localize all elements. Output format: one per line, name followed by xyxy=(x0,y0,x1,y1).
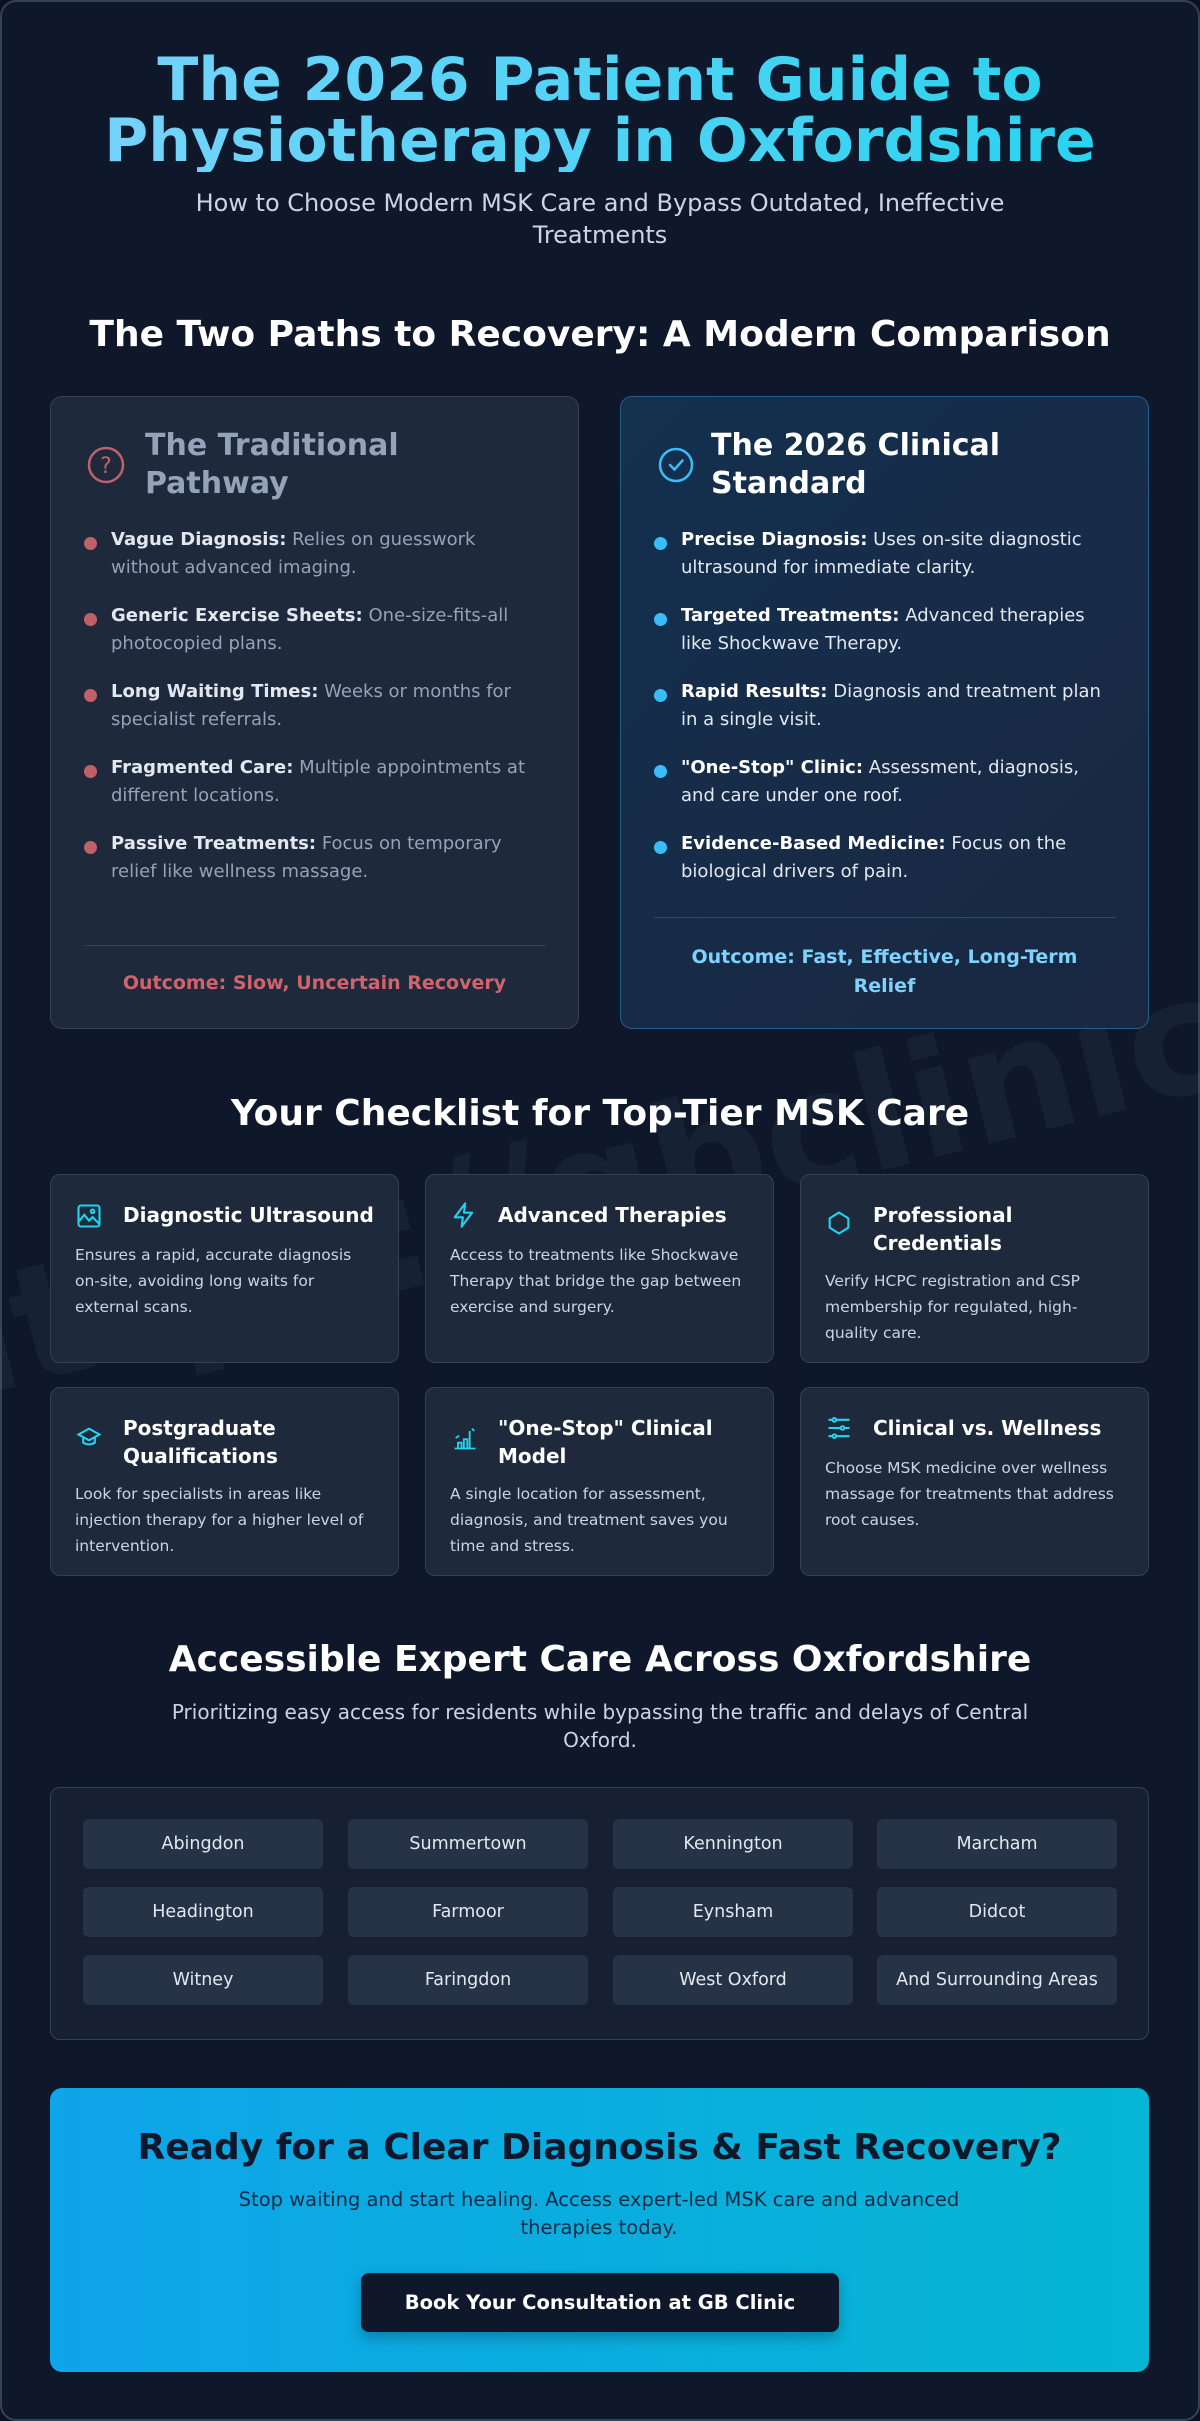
icon: check xyxy=(658,448,694,482)
card: one-stop: "One-Stop" Clinical Model xyxy=(498,1416,713,1468)
title: Physiotherapy in Oxfordshire xyxy=(104,106,1096,176)
panel: locations: Eynsham xyxy=(693,1902,773,1922)
panel: locations: Summertown xyxy=(409,1834,527,1854)
card heading xyxy=(711,428,1000,501)
title xyxy=(104,45,1096,176)
panel: locations: Faringdon xyxy=(425,1970,511,1990)
card: postgraduate: Postgraduate Qualifications xyxy=(123,1416,278,1468)
bullet list xyxy=(654,529,1101,882)
panel: locations: Witney xyxy=(173,1970,233,1990)
card: advanced therapies xyxy=(425,1174,774,1363)
panel: clinical standard: Targeted Treatments: Advanced therapies like Shockwave Therapy. xyxy=(681,605,1085,654)
panel: traditional pathway: Passive Treatments: Focus on temporary relief like wellness massage. xyxy=(111,833,502,882)
panel: clinical standard: Rapid Results: Diagnosis and treatment plan in a single visit. xyxy=(681,681,1101,730)
panel: locations: Abingdon xyxy=(161,1834,245,1854)
outcome: Outcome: Fast, Effective, Long-Term Relief xyxy=(692,946,1077,997)
heading: checklist: Your Checklist for Top-Tier MSK Care xyxy=(231,1093,969,1134)
panel: traditional pathway xyxy=(50,396,579,1029)
card: clinical vs wellness: Clinical vs. Wellness xyxy=(873,1416,1101,1440)
card: professional credentials: Professional Credentials xyxy=(873,1203,1013,1255)
card: diagnostic ultrasound: Ensures a rapid, accurate diagnosis on-site, avoiding long waits for external scans. xyxy=(75,1246,351,1316)
panel: clinical standard: "One-Stop" Clinic: Assessment, diagnosis, and care under one roof. xyxy=(681,757,1079,806)
card heading: The 2026 Clinical xyxy=(711,428,1000,463)
panel: locations: Farmoor xyxy=(432,1902,504,1922)
panel: locations: West Oxford xyxy=(679,1970,787,1990)
panel: locations: Didcot xyxy=(969,1902,1025,1922)
panel: locations: Headington xyxy=(152,1902,254,1922)
card: clinical vs wellness xyxy=(800,1387,1149,1576)
card: advanced therapies: Access to treatments like Shockwave Therapy that bridge the gap between exercise and surgery. xyxy=(450,1246,741,1316)
icon: question xyxy=(88,446,124,484)
button: Book Your Consultation at GB Clinic xyxy=(405,2291,795,2314)
card heading: The Traditional xyxy=(145,428,399,463)
card: diagnostic ultrasound: Diagnostic Ultrasound xyxy=(123,1203,374,1227)
panel: traditional pathway: Generic Exercise Sheets: One-size-fits-all photocopied plans. xyxy=(111,605,508,654)
button xyxy=(361,2273,839,2332)
cta panel xyxy=(50,2088,1149,2372)
card: one-stop xyxy=(425,1387,774,1576)
card: postgraduate xyxy=(50,1387,399,1576)
outcome: Outcome: Slow, Uncertain Recovery xyxy=(123,972,506,994)
panel: traditional pathway: Long Waiting Times: Weeks or months for specialist referrals. xyxy=(111,681,511,730)
icon: question: ? xyxy=(100,454,112,479)
panel: locations xyxy=(50,1787,1149,2040)
card: professional credentials: Verify HCPC registration and CSP membership for regulated, high-quality care. xyxy=(825,1272,1080,1342)
cta text: Stop waiting and start healing. Access expert-led MSK care and advanced therapies today. xyxy=(239,2188,959,2239)
panel: clinical standard: Evidence-Based Medicine: Focus on the biological drivers of pain. xyxy=(681,833,1066,882)
panel: clinical standard: Precise Diagnosis: Uses on-site diagnostic ultrasound for immediate clarity. xyxy=(681,529,1082,578)
card: postgraduate: Look for specialists in areas like injection therapy for a higher level of intervention. xyxy=(75,1485,363,1555)
subtitle: How to Choose Modern MSK Care and Bypass Outdated, Ineffective Treatments xyxy=(196,189,1004,249)
cta heading: Ready for a Clear Diagnosis & Fast Recovery? xyxy=(138,2127,1061,2168)
panel: locations: Marcham xyxy=(956,1834,1038,1854)
panel: traditional pathway: Vague Diagnosis: Relies on guesswork without advanced imaging. xyxy=(111,529,475,578)
checklist grid xyxy=(50,1174,1149,1576)
title: The 2026 Patient Guide to xyxy=(157,45,1043,115)
panel: locations: Kennington xyxy=(683,1834,783,1854)
subheading: accessible: Prioritizing easy access for residents while bypassing the traffic and delays of Central Oxford. xyxy=(172,1700,1028,1752)
panel: locations: And Surrounding Areas xyxy=(896,1970,1098,1990)
card: clinical vs wellness: Choose MSK medicine over wellness massage for treatments that address root causes. xyxy=(825,1459,1114,1529)
card heading xyxy=(145,428,399,501)
bullet list xyxy=(84,529,525,882)
card: one-stop: A single location for assessment, diagnosis, and treatment saves you time and stress. xyxy=(450,1485,728,1555)
heading: accessible care: Accessible Expert Care Across Oxfordshire xyxy=(169,1639,1031,1680)
card: advanced therapies: Advanced Therapies xyxy=(498,1203,727,1227)
panel: traditional pathway: Fragmented Care: Multiple appointments at different locations. xyxy=(111,757,525,806)
card heading: Pathway xyxy=(145,466,289,501)
card heading: Standard xyxy=(711,466,867,501)
heading: two paths: The Two Paths to Recovery: A Modern Comparison xyxy=(89,314,1111,355)
panel: clinical standard xyxy=(620,396,1149,1029)
card: diagnostic ultrasound xyxy=(50,1174,399,1363)
card: professional credentials xyxy=(800,1174,1149,1363)
